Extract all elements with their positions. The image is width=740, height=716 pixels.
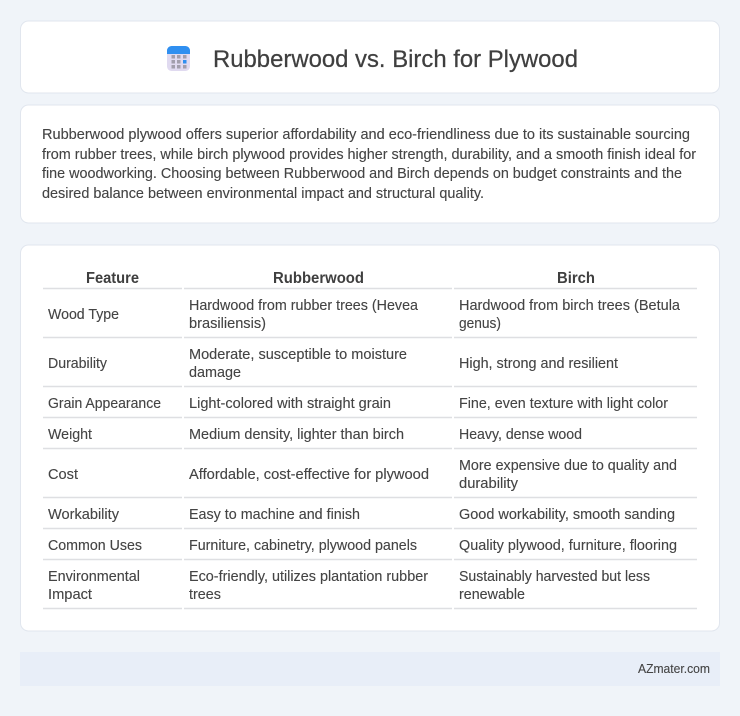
row: grain appearance: Fine, even texture with light color (459, 396, 668, 412)
row: environmental impact: Impact (48, 587, 92, 603)
row: durability: Moderate, susceptible to moisture (189, 347, 407, 363)
row: weight (48, 427, 582, 443)
row: common uses (48, 538, 677, 554)
table header: Feature (86, 270, 139, 287)
row: grain appearance: Grain Appearance (48, 396, 161, 412)
row: environmental impact: Sustainably harvested but less (459, 569, 650, 585)
footer: AZmater.com (638, 661, 710, 676)
row: wood type: genus) (459, 316, 501, 332)
row: cost: durability (459, 476, 519, 492)
row: weight: Weight (48, 427, 92, 443)
row: common uses: Quality plywood, furniture, flooring (459, 538, 677, 554)
panel: introduction text: Rubberwood plywood offers superior affordability and eco-friendliness due to its sustainable sourcing (42, 127, 690, 143)
row: wood type (48, 298, 680, 332)
icon: calendar (167, 46, 190, 71)
heading: Rubberwood vs. Birch for Plywood (213, 46, 578, 73)
row: environmental impact: Eco-friendly, utilizes plantation rubber (189, 569, 428, 585)
row: workability: Workability (48, 507, 120, 523)
row: wood type: Wood Type (48, 307, 119, 323)
panel: comparison table (20, 245, 720, 631)
row: wood type: brasiliensis) (189, 316, 266, 332)
panel: introduction text: desired balance between environmental impact and structural quality. (42, 186, 484, 202)
row: grain appearance: Light-colored with straight grain (189, 396, 391, 412)
row: wood type: Hardwood from rubber trees (Hevea (189, 298, 418, 314)
row: environmental impact: trees (189, 587, 221, 603)
row: durability (48, 347, 618, 381)
table header (86, 270, 595, 287)
panel: introduction text: from rubber trees, while birch plywood provides higher strength, durability, and a smooth finish ideal for (42, 147, 696, 163)
footer (20, 652, 720, 686)
row: durability: High, strong and resilient (459, 356, 618, 372)
row: environmental impact: renewable (459, 587, 525, 603)
row: common uses: Common Uses (48, 538, 142, 554)
row: weight: Medium density, lighter than birch (189, 427, 404, 443)
panel: introduction text (20, 105, 720, 223)
row: environmental impact (48, 569, 650, 603)
row: workability (48, 507, 675, 523)
panel: introduction text: fine woodworking. Choosing between Rubberwood and Birch depends on budget constraints and the (42, 166, 682, 182)
row: wood type: Hardwood from birch trees (Betula (459, 298, 680, 314)
row: environmental impact: Environmental (48, 569, 140, 585)
table header: Rubberwood (273, 270, 364, 287)
row: cost: Cost (48, 467, 78, 483)
row: workability: Easy to machine and finish (189, 507, 360, 523)
panel: title (20, 21, 720, 93)
row: workability: Good workability, smooth sanding (459, 507, 675, 523)
row: durability: damage (189, 365, 241, 381)
row: grain appearance (48, 396, 668, 412)
row: cost: More expensive due to quality and (459, 458, 677, 474)
row: cost: Affordable, cost-effective for plywood (189, 467, 429, 483)
row: durability: Durability (48, 356, 108, 372)
row: weight: Heavy, dense wood (459, 427, 582, 443)
row: cost (48, 458, 677, 492)
table header: Birch (557, 270, 595, 287)
row: common uses: Furniture, cabinetry, plywood panels (189, 538, 417, 554)
